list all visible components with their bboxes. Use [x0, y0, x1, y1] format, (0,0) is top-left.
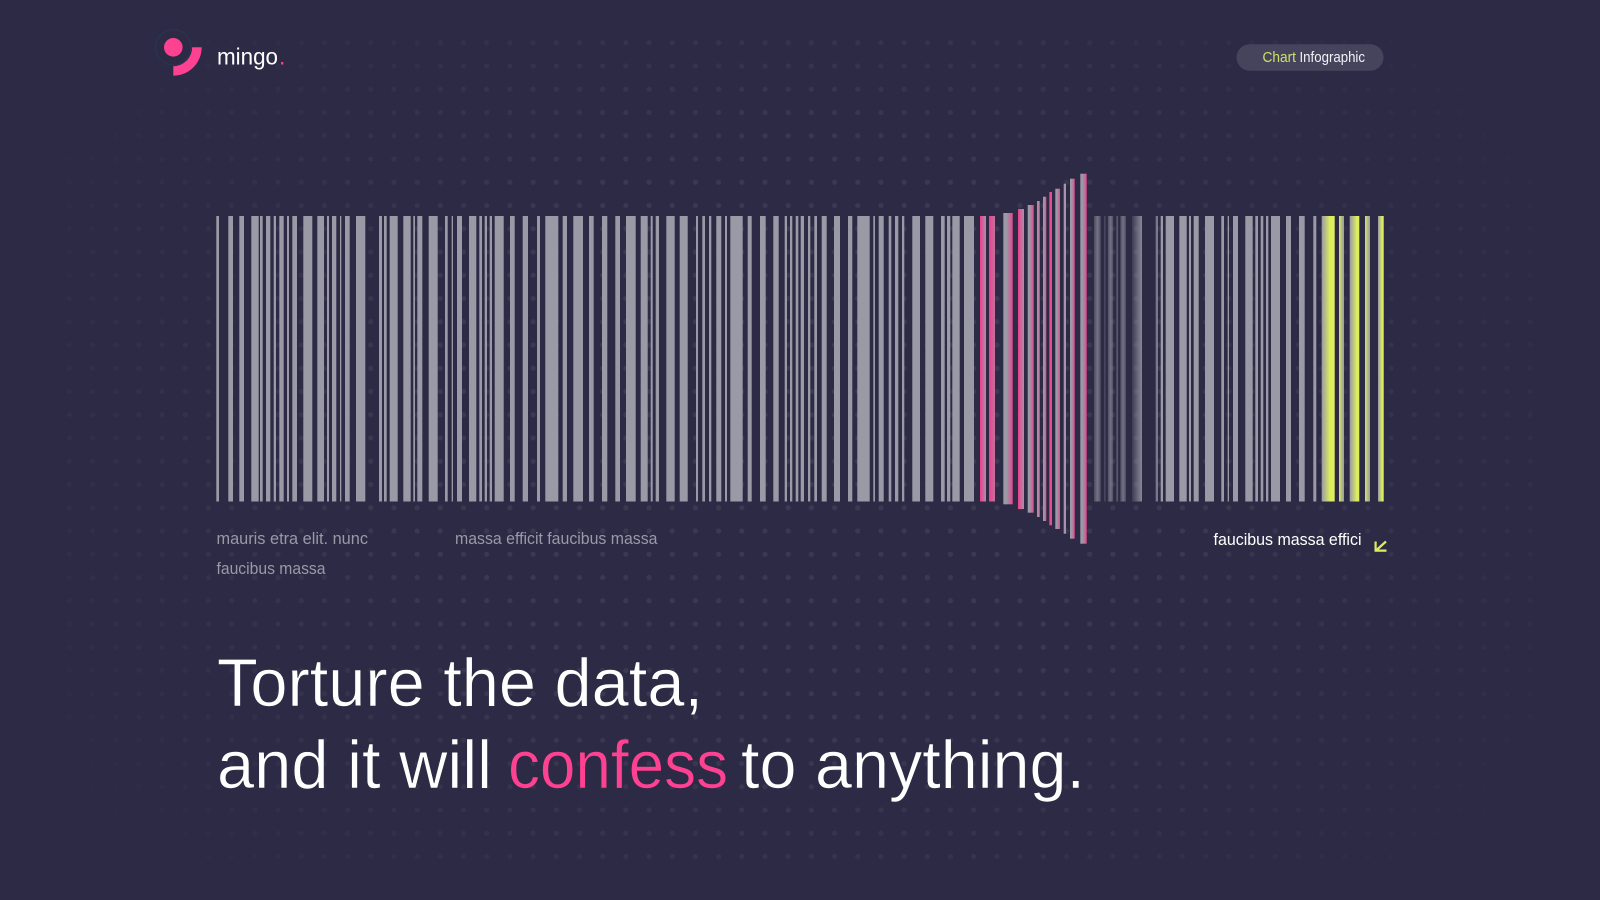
icon: logo smile mark — [156, 30, 202, 76]
chart: barcode bar chart — [216, 174, 1384, 544]
title: to anything. — [741, 727, 1085, 803]
tag pill: Chart Infographic — [1236, 44, 1384, 71]
title: Torture the data, — [217, 645, 703, 721]
caption: left label: mauris etra elit. nunc — [216, 529, 368, 548]
icon: arrow pointing down-left — [1376, 542, 1386, 551]
tag pill: Chart Infographic: Chart — [1262, 50, 1296, 66]
gray barcode bars, left segment — [216, 216, 974, 502]
title: and it will — [217, 727, 492, 803]
wordmark: mingo — [217, 44, 278, 70]
caption: right label: faucibus massa effici — [1214, 530, 1362, 549]
title: confess — [508, 727, 728, 803]
logo: mingo — [156, 30, 285, 76]
caption: left label: faucibus massa — [216, 559, 326, 578]
title — [217, 645, 1085, 803]
fading bars — [1094, 216, 1158, 502]
gray barcode bars, right segment — [1161, 216, 1316, 502]
wordmark: . — [279, 44, 285, 70]
yellow highlighted bars — [1322, 216, 1384, 502]
pink highlighted bars, flaring outward — [980, 174, 1087, 544]
caption: middle label: massa efficit faucibus massa — [455, 529, 658, 548]
caption: left label — [216, 529, 368, 578]
infographic canvas — [155, 29, 1390, 858]
tag pill: Chart Infographic: Infographic — [1300, 50, 1365, 66]
